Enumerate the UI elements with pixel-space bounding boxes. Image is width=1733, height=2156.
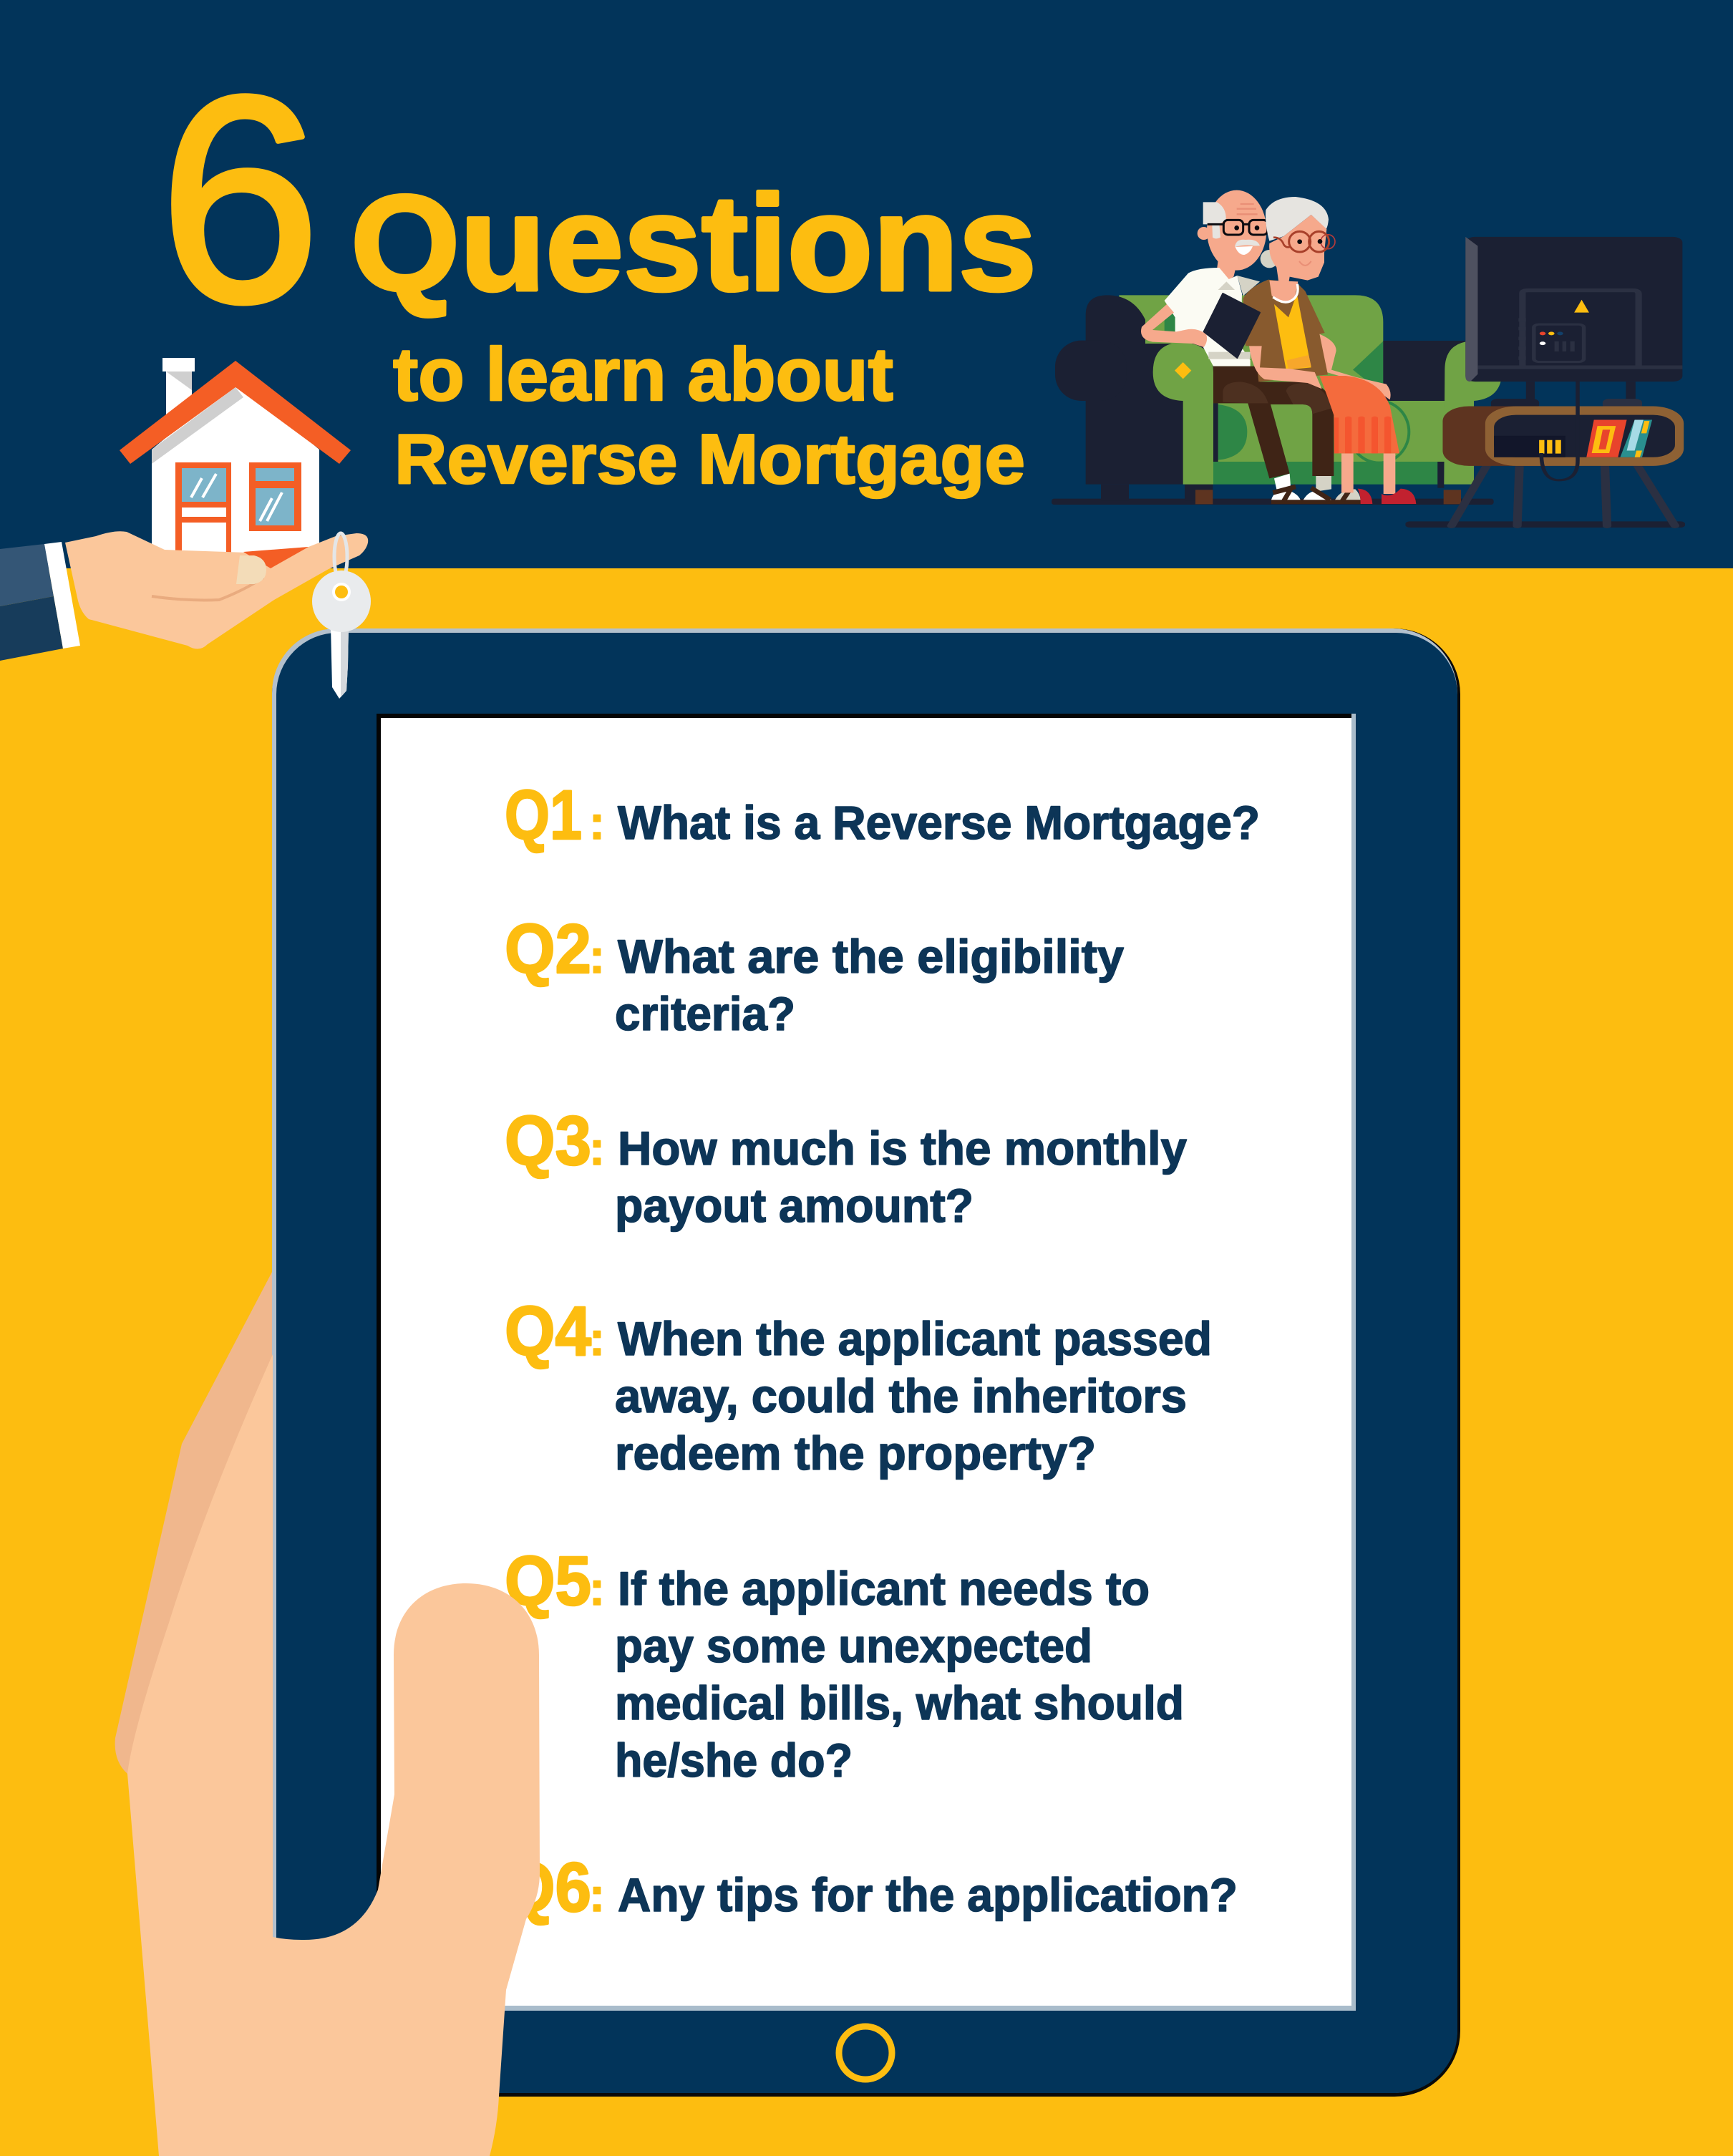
- question 2: What are the eligibility: [618, 930, 1124, 983]
- sleeve: [0, 544, 54, 606]
- television: [1465, 237, 1682, 382]
- question 5: pay some unexpected: [615, 1619, 1092, 1672]
- house base: [243, 547, 309, 568]
- header band: [0, 0, 1733, 568]
- illustration: key: [312, 533, 371, 699]
- floor line: [1405, 521, 1685, 528]
- question 5: If the applicant needs to: [618, 1562, 1150, 1615]
- illustration: hand holding tablet: [115, 1272, 540, 2156]
- question 5: he/she do?: [615, 1734, 853, 1787]
- question 2: [505, 910, 1124, 1040]
- subtitle: Reverse Mortgage: [394, 419, 1025, 498]
- right window: [249, 462, 301, 531]
- man's tablet: [1204, 293, 1260, 358]
- left window and door: [175, 462, 231, 554]
- question 6: :: [589, 1868, 605, 1921]
- question 3: How much is the monthly: [618, 1122, 1187, 1175]
- question 1: [505, 776, 1260, 854]
- home button: [839, 2026, 892, 2079]
- subtitle: [393, 333, 1025, 498]
- question 1: What is a Reverse Mortgage?: [618, 796, 1260, 849]
- illustration: TV on cabinet: [1405, 237, 1685, 528]
- floor line: [1052, 499, 1494, 505]
- subtitle: to learn about: [393, 333, 893, 417]
- title: 6 Questions: [159, 35, 1037, 363]
- cable: [1541, 359, 1578, 480]
- question 5: Q5: [505, 1542, 591, 1620]
- question 4: :: [589, 1312, 605, 1365]
- question 4: When the applicant passed: [618, 1312, 1212, 1365]
- question 6: Any tips for the application?: [618, 1868, 1238, 1921]
- question 3: payout amount?: [615, 1179, 974, 1232]
- palm: [65, 531, 368, 649]
- question 6: Q6: [505, 1848, 591, 1926]
- question 3: :: [589, 1122, 605, 1175]
- cabinet legs: [1452, 466, 1675, 526]
- question 5: [505, 1542, 1184, 1787]
- question 1: Q1: [505, 776, 582, 854]
- question 2: :: [589, 930, 605, 983]
- question 5: :: [589, 1562, 605, 1615]
- question 4: Q4: [505, 1292, 591, 1370]
- question 3: Q3: [505, 1102, 591, 1180]
- tablet screen: [377, 714, 1356, 2011]
- question 4: redeem the property?: [615, 1427, 1096, 1480]
- illustration: elderly couple on sofa: [1052, 190, 1502, 505]
- illustration: tablet body: [272, 628, 1460, 2097]
- question 5: medical bills, what should: [615, 1676, 1184, 1729]
- illustration: house: [120, 358, 351, 554]
- question 6: [505, 1848, 1238, 1926]
- woman: [1204, 197, 1416, 504]
- question 2: criteria?: [615, 987, 795, 1040]
- title: 6 Questions: Questions: [351, 167, 1037, 319]
- man: [1141, 190, 1361, 504]
- title: 6 Questions: 6: [159, 35, 321, 363]
- question 2: Q2: [505, 910, 591, 988]
- cabinet: [1442, 407, 1684, 466]
- question 3: [505, 1102, 1187, 1232]
- tv stand: [1526, 382, 1636, 402]
- question 4: [505, 1292, 1212, 1480]
- sofa: [1055, 295, 1502, 504]
- illustration: hand offering house: [0, 531, 368, 661]
- question 1: :: [589, 796, 605, 849]
- question 4: away, could the inheritors: [615, 1369, 1187, 1422]
